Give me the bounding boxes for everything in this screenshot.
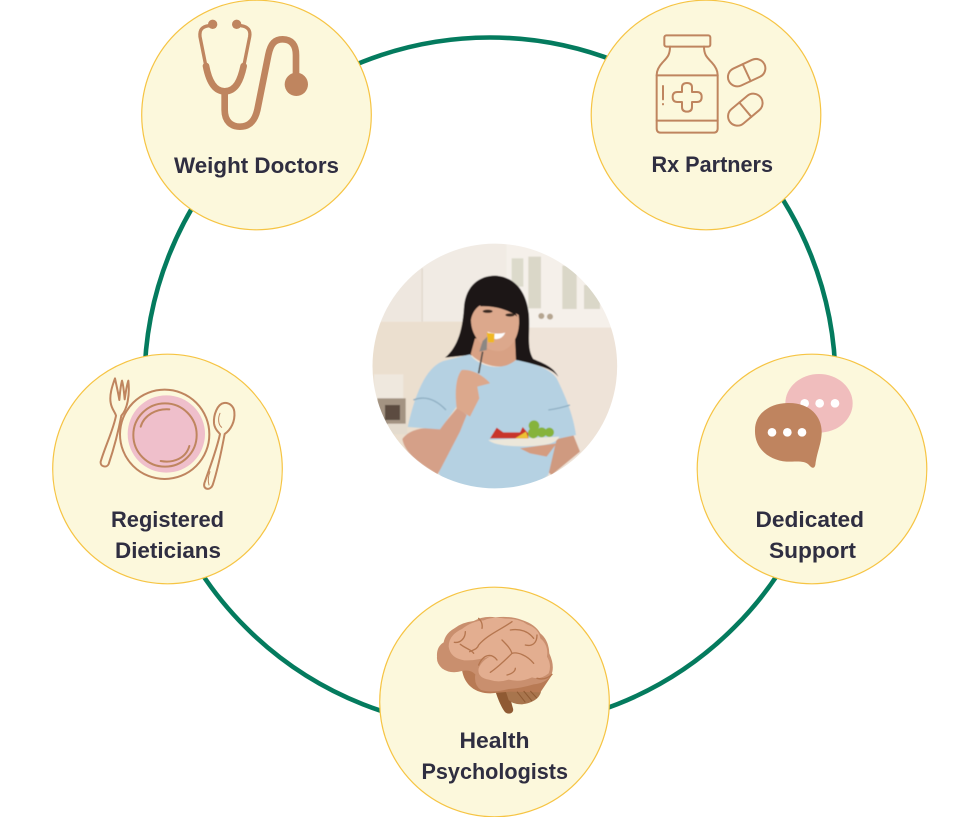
hand and fork <box>479 352 483 373</box>
label: Health Psychologists <box>422 728 568 784</box>
hair <box>445 276 558 377</box>
plate of vegetables <box>488 437 559 446</box>
icon: stethoscope <box>200 20 308 127</box>
panel: Weight Doctors <box>142 0 371 230</box>
green connecting ring <box>144 38 836 728</box>
icon: plate, fork and spoon <box>101 378 234 489</box>
label: Health Psychologists: Health <box>460 728 530 753</box>
icon: speech bubbles <box>755 374 853 468</box>
label: Rx Partners: Rx Partners <box>652 152 773 177</box>
panel: Health Psychologists <box>380 587 609 817</box>
label: Registered Dieticians: Registered <box>111 507 224 532</box>
icon: medicine bottle and pills <box>657 35 768 133</box>
face <box>470 304 520 340</box>
label: Weight Doctors: Weight Doctors <box>174 153 339 178</box>
arms <box>402 407 472 474</box>
panel: Rx Partners <box>591 0 821 230</box>
neck <box>471 338 516 367</box>
label: Dedicated Support <box>756 507 864 563</box>
icon: brain <box>437 617 553 714</box>
center photo: woman eating a healthy meal <box>372 244 618 488</box>
label: Health Psychologists: Psychologists <box>422 759 568 784</box>
label: Dedicated Support: Support <box>769 538 857 563</box>
panel: Registered Dieticians <box>53 354 282 584</box>
label: Registered Dieticians <box>111 507 224 563</box>
label: Dedicated Support: Dedicated <box>756 507 864 532</box>
label: Registered Dieticians: Dieticians <box>115 538 221 563</box>
shirt <box>408 354 576 498</box>
panel: Dedicated Support <box>697 354 927 584</box>
